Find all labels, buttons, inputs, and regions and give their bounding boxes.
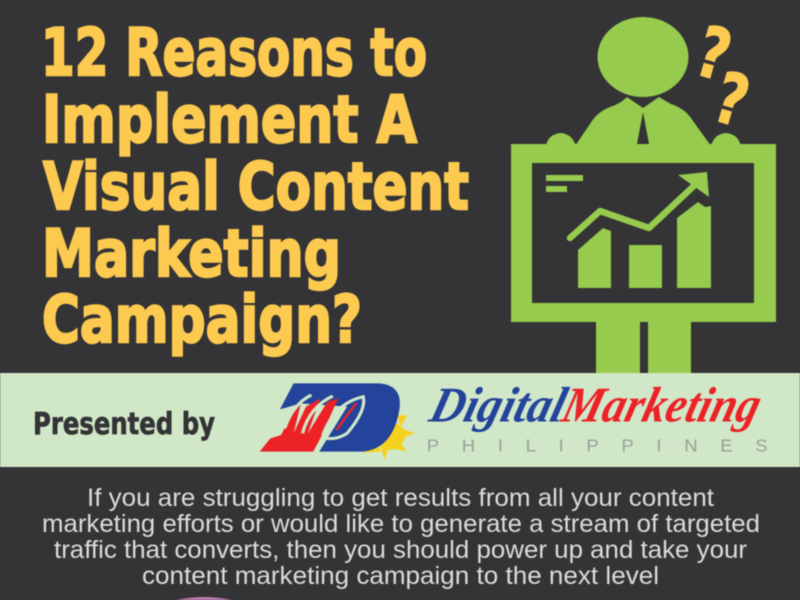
tie <box>637 112 649 144</box>
title: Marketing <box>42 217 341 292</box>
right hand <box>711 133 741 146</box>
bar chart <box>578 202 711 288</box>
board stand <box>596 320 691 373</box>
logo red base <box>260 398 338 452</box>
intro paragraph: content marketing campaign to the next level <box>142 562 659 590</box>
logo wordmark Philippines: PHILIPPINES <box>427 436 768 456</box>
logo blue D <box>280 383 400 452</box>
icon: question marks <box>688 10 758 143</box>
icon: question marks: ? <box>706 56 758 143</box>
intro paragraph: If you are struggling to get results from all your content <box>87 484 714 512</box>
intro paragraph: marketing efforts or would like to generate a stream of targeted <box>42 510 760 538</box>
presenter head <box>598 17 688 97</box>
icon: question marks: ? <box>688 10 740 97</box>
title <box>41 16 469 358</box>
intro paragraph: traffic that converts, then you should power up and take your <box>54 536 747 564</box>
next section circle, top edge <box>176 597 232 600</box>
logo sun <box>363 415 415 460</box>
intro paragraph <box>42 484 760 590</box>
left hand <box>546 133 576 146</box>
icon: presenter with chart board <box>511 17 776 373</box>
logo wordmark Digital: Digital <box>423 378 573 433</box>
logo cutouts <box>285 395 364 439</box>
board text lines <box>546 175 583 192</box>
title: 12 Reasons to <box>41 16 427 91</box>
presented by band <box>0 373 800 467</box>
board frame <box>511 144 776 322</box>
title: Visual Content <box>43 150 469 225</box>
presented by label: Presented by <box>33 407 215 442</box>
presenter body <box>575 97 711 146</box>
title: Implement A <box>42 83 417 158</box>
title: Campaign? <box>42 283 362 358</box>
logo: Digital Marketing Philippines <box>260 378 768 460</box>
trend arrow <box>570 172 709 238</box>
logo wordmark Marketing: Marketing <box>556 378 768 433</box>
